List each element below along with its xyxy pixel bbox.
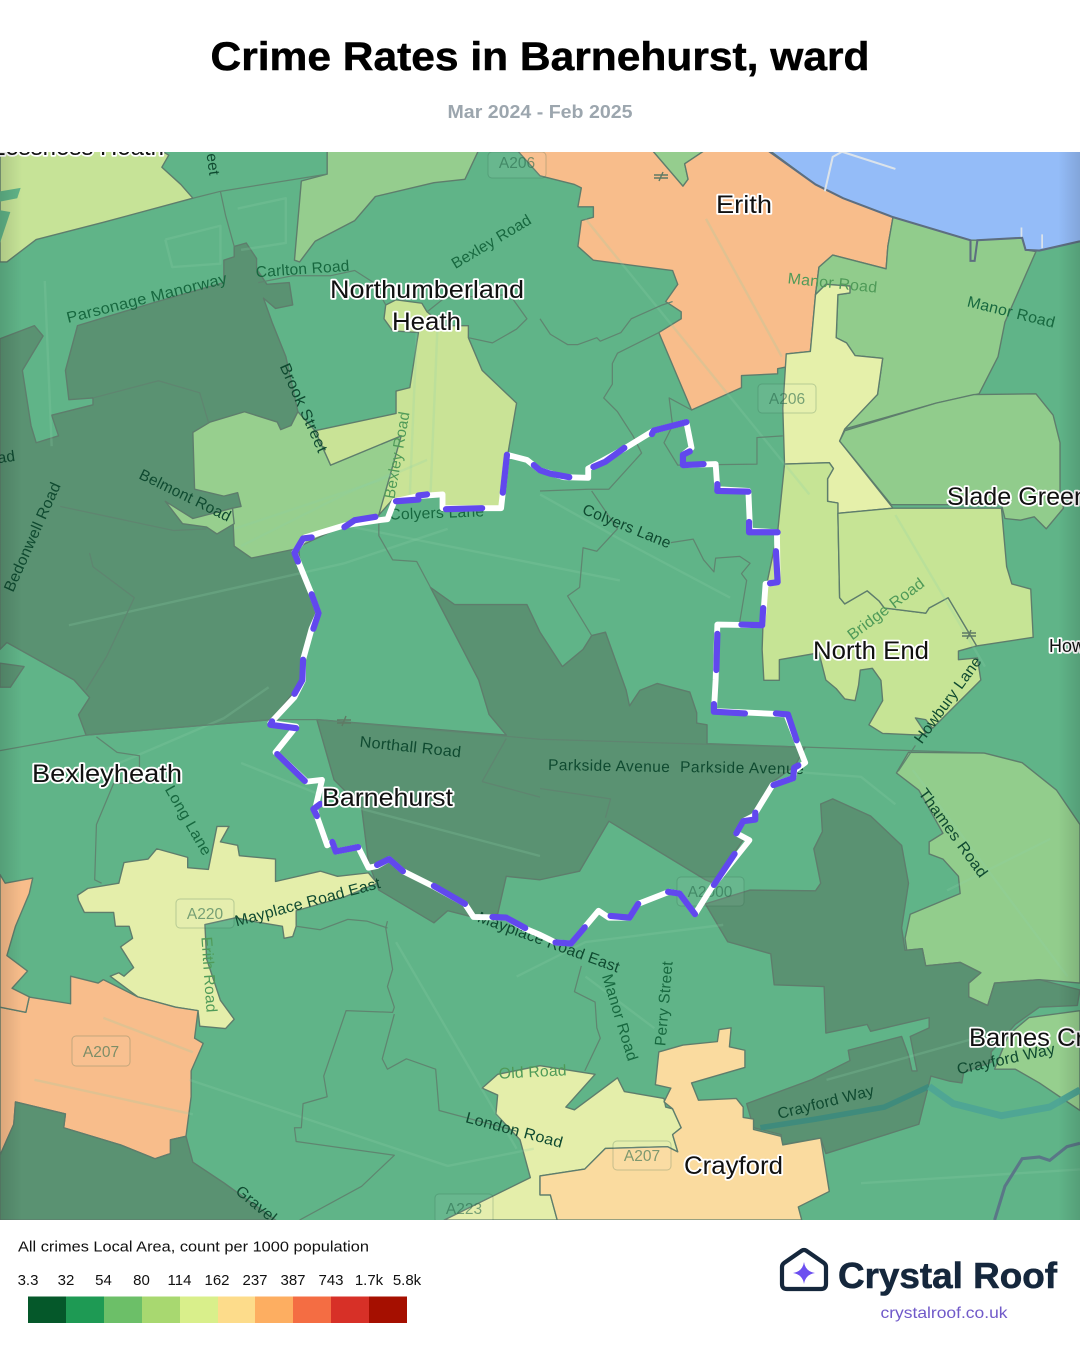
place name labels [0, 133, 1080, 1180]
road number shields: A220 [187, 906, 223, 923]
road name labels: Bridge Road [844, 575, 928, 644]
boundary white base line [270, 422, 805, 943]
road name labels: Carlton Road [255, 258, 350, 281]
road name labels: Manor Road [965, 293, 1057, 332]
legend scale values: 54 [95, 1272, 112, 1289]
road name labels: Bexley Road [449, 212, 535, 273]
road number shields: A2000 [688, 884, 733, 901]
map regions coloured by crime rate [0, 150, 1080, 1220]
legend scale values: 5.8k [393, 1272, 422, 1289]
road name labels: Brook Street [276, 361, 331, 456]
wordmark: Crystal Roof [838, 1255, 1058, 1296]
boundary purple dashes [270, 422, 798, 943]
road name labels: Parsonage Manorway [65, 270, 229, 327]
place name labels: Heath [392, 308, 461, 336]
subtitle: date range: Mar 2024 - Feb 2025 [448, 101, 632, 122]
road name labels: Perry Street [652, 960, 677, 1047]
road name labels: Parkside Avenue [548, 757, 670, 776]
road name labels: Thames Road [915, 785, 991, 881]
road number shields [72, 152, 816, 1223]
road name labels: eet [202, 152, 222, 177]
road name labels: Colyers Lane [389, 503, 485, 524]
road name labels: Mayplace Road East [475, 909, 622, 977]
road number shields: A206 [499, 155, 535, 172]
legend scale values: 237 [242, 1272, 268, 1289]
legend scale values: 32 [58, 1272, 74, 1289]
road name labels: Manor Road [787, 270, 878, 297]
legend scale values: 114 [168, 1272, 191, 1289]
road number shields: A207 [83, 1044, 119, 1061]
legend title: All crimes Local Area, count per 1000 population [18, 1240, 369, 1256]
road name labels [0, 152, 1057, 1226]
coastline and piers [767, 150, 1080, 261]
legend colour bar [28, 1296, 407, 1323]
legend scale values: 743 [318, 1272, 344, 1289]
road name labels: Manor Road [598, 972, 641, 1063]
railway station marks [337, 172, 976, 726]
logo: Crystal Roof [782, 1250, 1058, 1296]
minor roads [34, 198, 1080, 1183]
legend scale values: 80 [133, 1272, 150, 1289]
road name labels: Old Road [498, 1062, 567, 1083]
road name labels: London Road [464, 1110, 565, 1152]
road name labels: Mayplace Road East [233, 875, 383, 930]
map edge shading [0, 152, 1080, 1220]
road name labels: Crayford Way [776, 1082, 876, 1123]
road name labels: Parkside Avenue [680, 759, 804, 778]
place name labels: Erith [716, 191, 772, 219]
place name labels: Barnehurst [322, 784, 453, 812]
legend scale values [18, 1272, 422, 1289]
icon: house with star [782, 1250, 826, 1289]
road name labels: Gravel [232, 1183, 280, 1226]
place name labels: North End [813, 637, 929, 665]
road name labels: Colyers Lane [580, 501, 673, 552]
road name labels: Long Lane [161, 783, 215, 859]
road name labels: Belmont Road [136, 466, 234, 526]
title: Crime Rates in Barnehurst, ward [210, 35, 870, 79]
rivers [760, 1086, 1080, 1220]
road number shields: A206 [769, 391, 805, 408]
road name labels: Erith Road [197, 936, 220, 1013]
place name labels: Crayford [684, 1152, 783, 1180]
road name labels: Northall Road [359, 734, 462, 761]
legend scale values: 387 [280, 1272, 306, 1289]
website link: crystalroof.co.uk [880, 1305, 1009, 1322]
ward and neighbourhood boundary lines [0, 174, 984, 1220]
legend scale values: 162 [204, 1272, 230, 1289]
legend scale values: 1.7k [355, 1272, 384, 1289]
road name labels: Crayford Way [955, 1041, 1057, 1078]
road name labels: Bedonwell Road [1, 480, 65, 595]
road number shields: A207 [624, 1148, 660, 1165]
legend scale values: 3.3 [18, 1272, 38, 1289]
road number shields: A223 [446, 1201, 482, 1218]
road name labels: Howbury Lane [911, 654, 986, 747]
place name labels: Bexleyheath [32, 760, 182, 788]
road name labels: Bexley Road [382, 410, 414, 500]
ward boundary: Barnehurst [270, 422, 805, 943]
place name labels: Northumberland [330, 276, 524, 304]
